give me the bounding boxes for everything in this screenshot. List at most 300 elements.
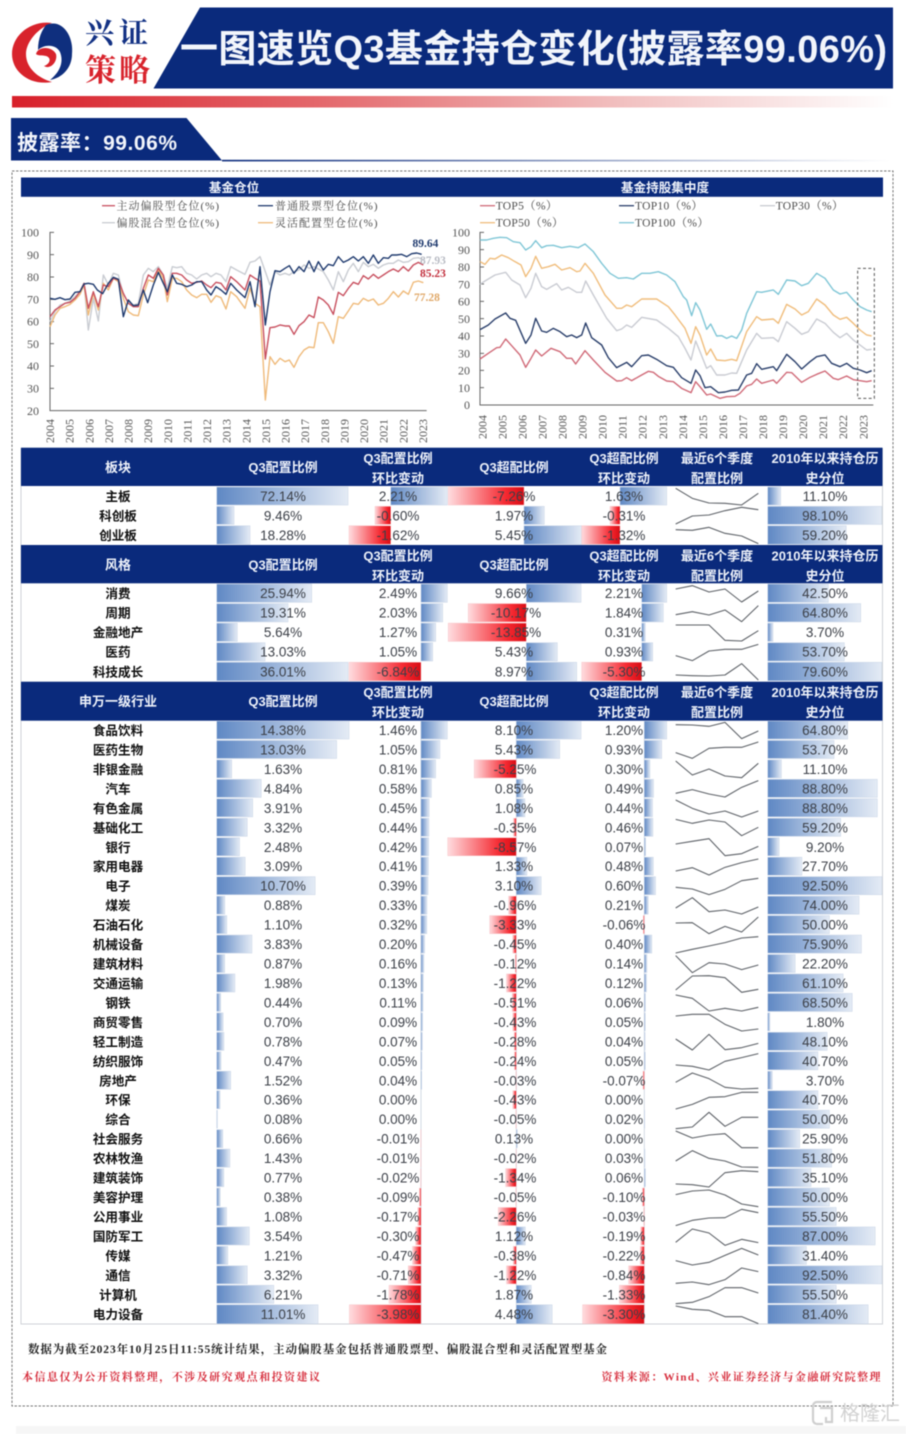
row: 汽车: 汽车	[105, 781, 131, 796]
table header: styles	[21, 545, 882, 583]
x axis labels: holding concentration: 2015	[696, 415, 710, 439]
table header: styles: 2010年以来持仓历	[772, 548, 878, 563]
row: 周期: 64.80%	[802, 606, 848, 621]
row: 非银金融: 0.81%	[379, 762, 417, 777]
x axis labels: fund position: 2010	[161, 419, 175, 443]
table header: styles: 环比变动	[372, 568, 424, 583]
x axis labels: holding concentration: 2008	[556, 415, 570, 439]
row: 交通运输: 交通运输	[93, 976, 144, 991]
logo: Xingzheng strategy: 策略	[85, 53, 150, 88]
y axis labels: holding concentration: 20	[458, 364, 470, 378]
row: 国防军工: 国防军工	[93, 1229, 144, 1244]
bottom strip	[16, 1426, 906, 1434]
table header: sectors: Q3超配比例	[479, 460, 549, 475]
row: 农林牧渔: -0.02%	[494, 1151, 536, 1166]
subtitle: disclosure rate	[11, 118, 890, 161]
sparklines: styles	[676, 586, 758, 680]
row: 非银金融: 1.63%	[264, 762, 302, 777]
sparklines: industries upper	[676, 722, 758, 1011]
table header: sectors: Q3超配比例	[589, 451, 659, 466]
row: 石油石化: 1.10%	[264, 918, 302, 933]
row: 机械设备: 机械设备	[93, 937, 144, 952]
y axis labels: holding concentration: 10	[458, 381, 470, 395]
row: 电力设备: 4.48%	[495, 1307, 533, 1322]
y axis labels: fund position: 30	[27, 382, 39, 396]
row: 交通运输: 61.10%	[802, 976, 848, 991]
row: 通信: -1.22%	[494, 1268, 536, 1283]
row: 煤炭	[105, 896, 859, 914]
y axis labels: fund position: 50	[27, 337, 39, 351]
row: 交通运输: -1.22%	[494, 976, 536, 991]
row: 食品饮料: 食品饮料	[93, 723, 144, 738]
row: 通信: 3.32%	[264, 1268, 302, 1283]
row: 医药	[105, 643, 848, 661]
row: 消费: 42.50%	[802, 586, 848, 601]
row: 基础化工	[93, 818, 848, 836]
row: 建筑材料: 0.87%	[264, 957, 302, 972]
row: 医药生物: 1.05%	[379, 742, 417, 757]
legend: holding concentration: TOP5（%）	[496, 200, 558, 212]
y axis labels: holding concentration	[452, 226, 470, 412]
row: 农林牧渔: 51.80%	[802, 1151, 848, 1166]
row: 综合: 0.00%	[379, 1112, 417, 1127]
row: 医药: 5.43%	[495, 645, 533, 660]
table header: industries: Q3超配比例	[589, 685, 659, 700]
watermark: Gelonghui: 格隆汇	[840, 1402, 900, 1425]
row: 医药生物: 0.93%	[605, 742, 643, 757]
heading: fund position: 基金仓位	[209, 180, 260, 195]
y axis labels: holding concentration: 90	[458, 243, 470, 257]
row: 电力设备	[93, 1305, 868, 1324]
y axis labels: holding concentration: 80	[458, 260, 470, 274]
x axis labels: holding concentration: 2018	[756, 415, 770, 439]
row: 美容护理: 美容护理	[93, 1190, 144, 1205]
row: 商贸零售: -0.43%	[494, 1015, 536, 1030]
row: 周期: 2.03%	[379, 606, 417, 621]
row: 国防军工: -0.30%	[377, 1229, 419, 1244]
legend: fund position: 偏股混合型仓位(%)	[116, 216, 220, 230]
x axis labels: holding concentration: 2009	[576, 415, 590, 439]
row: 综合: 0.02%	[605, 1112, 643, 1127]
row: 电力设备: 电力设备	[93, 1307, 144, 1322]
row: 综合: 综合	[105, 1112, 131, 1127]
row: 科创板: 科创板	[99, 508, 137, 523]
x axis labels: holding concentration: 2011	[616, 415, 630, 439]
y axis labels: fund position: 100	[21, 226, 39, 240]
row: 环保: 40.70%	[802, 1093, 848, 1108]
row: 钢铁: 0.44%	[264, 995, 302, 1010]
table header: sectors	[21, 448, 882, 486]
row: 交通运输: 0.13%	[379, 976, 417, 991]
row: 消费: 9.66%	[495, 586, 533, 601]
row: 电子	[105, 877, 882, 895]
x axis labels: fund position: 2012	[200, 419, 214, 443]
title banner	[154, 8, 893, 88]
row: 主板	[105, 487, 847, 505]
row: 公用事业: 1.08%	[264, 1210, 302, 1224]
row: 周期: 19.31%	[260, 606, 306, 621]
row: 农林牧渔	[93, 1149, 848, 1167]
legend: holding concentration: TOP100（%）	[635, 216, 709, 230]
x axis labels: fund position: 2007	[102, 419, 116, 443]
table header: sectors: 最近6个季度	[681, 451, 753, 466]
row: 电子: 0.60%	[605, 879, 643, 894]
y axis labels: fund position: 70	[27, 292, 39, 306]
row: 美容护理: -0.09%	[377, 1190, 419, 1205]
row: 传媒: -0.38%	[494, 1248, 536, 1263]
row: 周期: 周期	[105, 607, 131, 621]
subtitle: disclosure rate: 披露率：99.06%	[17, 132, 177, 155]
row: 纺织服饰: 0.05%	[605, 1054, 643, 1069]
row: 综合: 50.00%	[802, 1112, 848, 1127]
row: 房地产: 3.70%	[806, 1073, 844, 1088]
row: 社会服务: 社会服务	[93, 1132, 144, 1147]
row: 主板: 主板	[105, 489, 131, 504]
row: 科技成长: 科技成长	[93, 664, 144, 679]
row: 有色金属: 1.08%	[495, 801, 533, 816]
row: 传媒: -0.22%	[603, 1248, 645, 1263]
row: 公用事业	[93, 1208, 848, 1226]
y axis labels: fund position: 90	[27, 248, 39, 262]
row: 金融地产: 5.64%	[264, 625, 302, 640]
row: 钢铁	[105, 993, 852, 1011]
row: 科技成长: -6.84%	[377, 664, 419, 679]
table header: industries: Q3配置比例	[363, 685, 433, 700]
row: 美容护理: -0.10%	[603, 1190, 645, 1205]
row: 基础化工: 基础化工	[93, 820, 144, 835]
row: 医药: 1.05%	[379, 645, 417, 660]
table header: styles: Q3配置比例	[363, 548, 433, 563]
x axis labels: fund position: 2019	[338, 419, 352, 443]
table header: sectors: 配置比例	[691, 471, 743, 486]
table header: industries: 环比变动	[598, 705, 650, 720]
row: 基础化工: 59.20%	[802, 820, 848, 835]
row: 基础化工: 0.44%	[379, 820, 417, 835]
row: 医药生物: 医药生物	[93, 742, 144, 757]
row: 石油石化: -0.06%	[603, 918, 645, 933]
x axis labels: holding concentration: 2017	[736, 415, 750, 439]
row: 纺织服饰: 40.70%	[802, 1054, 848, 1069]
row: 消费: 消费	[105, 586, 131, 601]
table header: styles: Q3超配比例	[589, 548, 659, 563]
x axis labels: fund position: 2014	[239, 419, 253, 443]
row: 电力设备: 11.01%	[261, 1307, 305, 1322]
row: 汽车: 0.58%	[379, 781, 417, 796]
row: 房地产: -0.07%	[603, 1073, 645, 1088]
table header: industries: 配置比例	[691, 705, 743, 720]
x axis labels: fund position: 2017	[298, 419, 312, 443]
table header: industries: 环比变动	[372, 705, 424, 720]
row: 社会服务: 0.00%	[605, 1132, 643, 1147]
row: 商贸零售: 0.70%	[264, 1015, 302, 1030]
panel: table frame	[21, 448, 882, 1324]
data labels: fund position	[412, 238, 446, 304]
row: 通信: 通信	[105, 1268, 131, 1283]
table header: styles: 环比变动	[598, 568, 650, 583]
row: 金融地产: -13.85%	[491, 625, 541, 640]
row: 机械设备: 0.20%	[379, 937, 417, 952]
row: 通信: -0.71%	[377, 1268, 419, 1283]
row: 建筑材料: 建筑材料	[93, 957, 144, 972]
row: 石油石化: 50.00%	[802, 918, 848, 933]
table header: sectors: 2010年以来持仓历	[772, 451, 878, 466]
row: 创业板: 创业板	[99, 528, 137, 543]
legend: holding concentration: TOP50（%）	[496, 216, 564, 230]
row: 有色金属: 88.80%	[802, 801, 848, 816]
row: 交通运输: 0.12%	[605, 976, 643, 991]
row: 石油石化	[93, 916, 848, 934]
row: 电子: 92.50%	[802, 879, 848, 894]
row: 科创板	[99, 506, 882, 524]
x axis labels: fund position: 2008	[122, 419, 136, 443]
row: 公用事业: -0.17%	[377, 1210, 419, 1224]
row: 商贸零售: 0.09%	[379, 1015, 417, 1030]
row: 钢铁: 0.06%	[605, 995, 643, 1010]
row: 非银金融: 0.30%	[605, 762, 643, 777]
table header: industries	[21, 682, 882, 721]
row: 综合	[105, 1110, 848, 1128]
y axis labels: holding concentration: 40	[458, 329, 470, 343]
row: 纺织服饰: -0.24%	[494, 1054, 536, 1069]
row: 计算机: -1.78%	[377, 1287, 419, 1302]
x axis labels: fund position	[43, 419, 430, 443]
row: 创业板	[99, 526, 848, 544]
y axis labels: holding concentration: 70	[458, 277, 470, 291]
row: 电力设备: -3.98%	[377, 1307, 419, 1322]
row: 建筑装饰: 0.77%	[264, 1171, 302, 1186]
row: 社会服务	[93, 1130, 848, 1148]
row: 银行	[105, 838, 844, 856]
row: 环保: 0.00%	[379, 1093, 417, 1108]
row: 石油石化: -3.33%	[494, 918, 536, 933]
x axis labels: fund position: 2011	[180, 419, 194, 443]
row: 煤炭: 煤炭	[105, 899, 131, 913]
x axis labels: fund position: 2020	[357, 419, 371, 443]
x axis labels: holding concentration	[475, 415, 870, 439]
row: 科创板: 1.97%	[495, 508, 533, 523]
row: 计算机: 计算机	[99, 1287, 137, 1302]
row: 食品饮料: 14.38%	[260, 723, 306, 738]
row: 计算机: 55.50%	[802, 1287, 848, 1302]
row: 科创板: 9.46%	[264, 508, 302, 523]
footnote: disclaimer: 本信息仅为公开资料整理，不涉及研究观点和投资建议	[22, 1370, 320, 1384]
row: 汽车	[105, 779, 877, 797]
table header: styles: Q3超配比例	[479, 557, 549, 572]
row: 商贸零售: 商贸零售	[93, 1015, 143, 1030]
footnote: data note: 数据为截至2023年10月25日11:55统计结果，主动偏股基金包括普通股票型、偏股混合型和灵活配置型基金	[28, 1342, 608, 1356]
row: 家用电器: 3.09%	[264, 859, 302, 874]
row: 建筑材料	[93, 955, 848, 973]
row: 美容护理: 50.00%	[802, 1190, 848, 1205]
row: 创业板: 5.45%	[495, 528, 533, 543]
row: 国防军工: 87.00%	[802, 1229, 848, 1244]
row: 社会服务: 25.90%	[802, 1132, 848, 1147]
row: 轻工制造: 0.04%	[605, 1034, 643, 1049]
row: 主板: -7.26%	[493, 489, 535, 504]
row: 创业板: 59.20%	[802, 528, 848, 543]
row: 国防军工: -0.19%	[603, 1229, 645, 1244]
table header: styles: 配置比例	[691, 568, 743, 583]
row: 建筑装饰: -0.02%	[377, 1171, 419, 1186]
row: 有色金属	[93, 799, 877, 817]
row: 钢铁: 0.11%	[379, 995, 417, 1010]
table header: industries: Q3配置比例	[248, 694, 318, 709]
row: 建筑装饰: 0.06%	[605, 1171, 643, 1186]
row: 医药: 53.70%	[802, 645, 848, 660]
x axis labels: holding concentration: 2021	[816, 415, 830, 439]
row: 综合: 0.08%	[264, 1112, 302, 1127]
row: 轻工制造	[93, 1032, 848, 1050]
table header: industries: 最近6个季度	[681, 685, 753, 700]
row: 科创板: 98.10%	[802, 508, 848, 523]
row: 食品饮料: 64.80%	[802, 723, 848, 738]
table header: industries: 史分位	[805, 705, 845, 720]
y axis labels: holding concentration: 30	[458, 346, 470, 360]
row: 通信	[105, 1266, 882, 1284]
x axis labels: holding concentration: 2014	[676, 415, 690, 439]
title banner: 一图速览Q3基金持仓变化(披露率99.06%)	[180, 29, 887, 71]
row: 机械设备: 3.83%	[264, 937, 302, 952]
row: 石油石化: 0.32%	[379, 918, 417, 933]
row: 消费: 25.94%	[260, 586, 306, 601]
row: 创业板: 18.28%	[260, 528, 306, 543]
row: 轻工制造: 0.78%	[264, 1034, 302, 1049]
x axis labels: fund position: 2013	[220, 419, 234, 443]
y axis labels: holding concentration: 0	[464, 398, 470, 412]
row: 金融地产: 0.31%	[605, 625, 643, 640]
row: 电子: 3.10%	[495, 879, 533, 894]
row: 基础化工: 0.46%	[605, 820, 643, 835]
row: 公用事业: 公用事业	[93, 1210, 143, 1224]
line chart: holding concentration	[480, 232, 874, 405]
row: 美容护理: 0.38%	[264, 1190, 302, 1205]
row: 非银金融: 11.10%	[803, 762, 847, 777]
row: 房地产: 房地产	[99, 1073, 137, 1088]
legend: fund position: 灵活配置型仓位(%)	[275, 216, 378, 230]
row: 主板: 2.21%	[379, 489, 417, 504]
x axis labels: holding concentration: 2004	[475, 415, 489, 439]
row: 农林牧渔: 0.03%	[605, 1151, 643, 1166]
row: 建筑装饰: 35.10%	[802, 1171, 848, 1186]
data labels: fund position: 89.64	[412, 238, 439, 250]
row: 煤炭: -0.96%	[494, 898, 536, 913]
row: 钢铁: -0.51%	[494, 995, 536, 1010]
legend: fund position	[102, 198, 378, 230]
x axis labels: holding concentration: 2020	[796, 415, 810, 439]
row: 环保: -0.43%	[494, 1093, 536, 1108]
table header: sectors: Q3配置比例	[248, 460, 318, 475]
row: 环保	[105, 1091, 848, 1109]
x axis labels: fund position: 2023	[416, 419, 430, 443]
row: 家用电器: 1.33%	[495, 859, 533, 874]
table header: styles: 史分位	[805, 568, 845, 583]
y axis labels: fund position: 20	[27, 404, 39, 418]
x axis labels: holding concentration: 2023	[856, 415, 870, 439]
row: 电子: 电子	[105, 880, 131, 894]
heading: holding concentration: 基金持股集中度	[621, 180, 709, 195]
row: 交通运输: 1.98%	[264, 976, 302, 991]
panel: holding concentration chart	[452, 178, 883, 439]
row: 纺织服饰: 0.47%	[264, 1054, 302, 1069]
row: 科创板: -0.31%	[603, 508, 645, 523]
heading: holding concentration	[452, 178, 883, 197]
x axis labels: holding concentration: 2013	[656, 415, 670, 439]
row: 家用电器: 27.70%	[802, 859, 848, 874]
row: 非银金融: -5.25%	[494, 762, 536, 777]
y axis labels: holding concentration: 60	[458, 295, 470, 309]
row: 综合: -0.05%	[494, 1112, 536, 1127]
row: 钢铁: 68.50%	[802, 995, 848, 1010]
table header: sectors: 环比变动	[598, 471, 650, 486]
row: 房地产: 1.52%	[264, 1073, 302, 1088]
row: 轻工制造: -0.28%	[494, 1034, 536, 1049]
table header: sectors: 板块	[105, 460, 131, 475]
x axis labels: holding concentration: 2016	[716, 415, 730, 439]
row: 周期: -10.17%	[491, 606, 541, 621]
x axis labels: holding concentration: 2010	[596, 415, 610, 439]
row: 电子: 10.70%	[260, 879, 306, 894]
y axis labels: holding concentration: 100	[452, 226, 470, 240]
row: 通信: -0.84%	[603, 1268, 645, 1283]
row: 建筑装饰: 建筑装饰	[93, 1171, 144, 1186]
row: 建筑材料: 0.14%	[605, 957, 643, 972]
row: 煤炭: 0.33%	[379, 898, 417, 913]
row: 科创板: -0.60%	[377, 508, 419, 523]
row: 有色金属: 有色金属	[93, 801, 143, 816]
sparklines: industries lower	[676, 1014, 758, 1324]
row: 国防军工: 1.12%	[495, 1229, 533, 1244]
row: 计算机: 1.87%	[495, 1287, 533, 1302]
row: 家用电器: 0.41%	[379, 859, 417, 874]
row: 机械设备: 0.40%	[605, 937, 643, 952]
legend: fund position: 普通股票型仓位(%)	[275, 198, 378, 212]
y axis labels: fund position: 40	[27, 359, 39, 373]
row: 机械设备: -0.45%	[494, 937, 536, 952]
row: 食品饮料: 8.10%	[495, 723, 533, 738]
row: 建筑材料: 22.20%	[802, 957, 848, 972]
x axis labels: holding concentration: 2022	[836, 415, 850, 439]
row: 农林牧渔: 1.43%	[264, 1151, 302, 1166]
row: 基础化工: 3.32%	[264, 820, 302, 835]
row: 银行: 9.20%	[806, 840, 844, 855]
y axis labels: fund position: 80	[27, 270, 39, 284]
row: 银行: 0.07%	[605, 840, 643, 855]
x axis labels: fund position: 2022	[396, 419, 410, 443]
row: 银行: 0.42%	[379, 840, 417, 855]
row: 计算机: 6.21%	[264, 1287, 302, 1302]
x axis labels: holding concentration: 2012	[636, 415, 650, 439]
line chart: fund position	[50, 232, 427, 411]
heading: fund position	[21, 178, 452, 197]
row: 汽车: 4.84%	[264, 781, 302, 796]
row: 银行: -8.57%	[494, 840, 536, 855]
row: 农林牧渔: -0.01%	[377, 1151, 419, 1166]
row: 公用事业: -2.26%	[494, 1210, 536, 1224]
row: 家用电器: 0.48%	[605, 859, 643, 874]
row: 医药生物: 53.70%	[802, 742, 848, 757]
row: 石油石化: 石油石化	[93, 918, 144, 933]
x axis labels: holding concentration: 2005	[495, 415, 509, 439]
row: 传媒: 传媒	[105, 1248, 131, 1263]
row: 建筑装饰	[93, 1169, 848, 1187]
row: 金融地产: 1.27%	[379, 625, 417, 640]
row: 电力设备: 81.40%	[802, 1307, 848, 1322]
row: 食品饮料	[93, 721, 848, 739]
x axis labels: holding concentration: 2007	[536, 415, 550, 439]
table header: sectors: 史分位	[805, 471, 845, 486]
row: 传媒: 31.40%	[802, 1248, 848, 1263]
row: 汽车: 0.85%	[495, 781, 533, 796]
